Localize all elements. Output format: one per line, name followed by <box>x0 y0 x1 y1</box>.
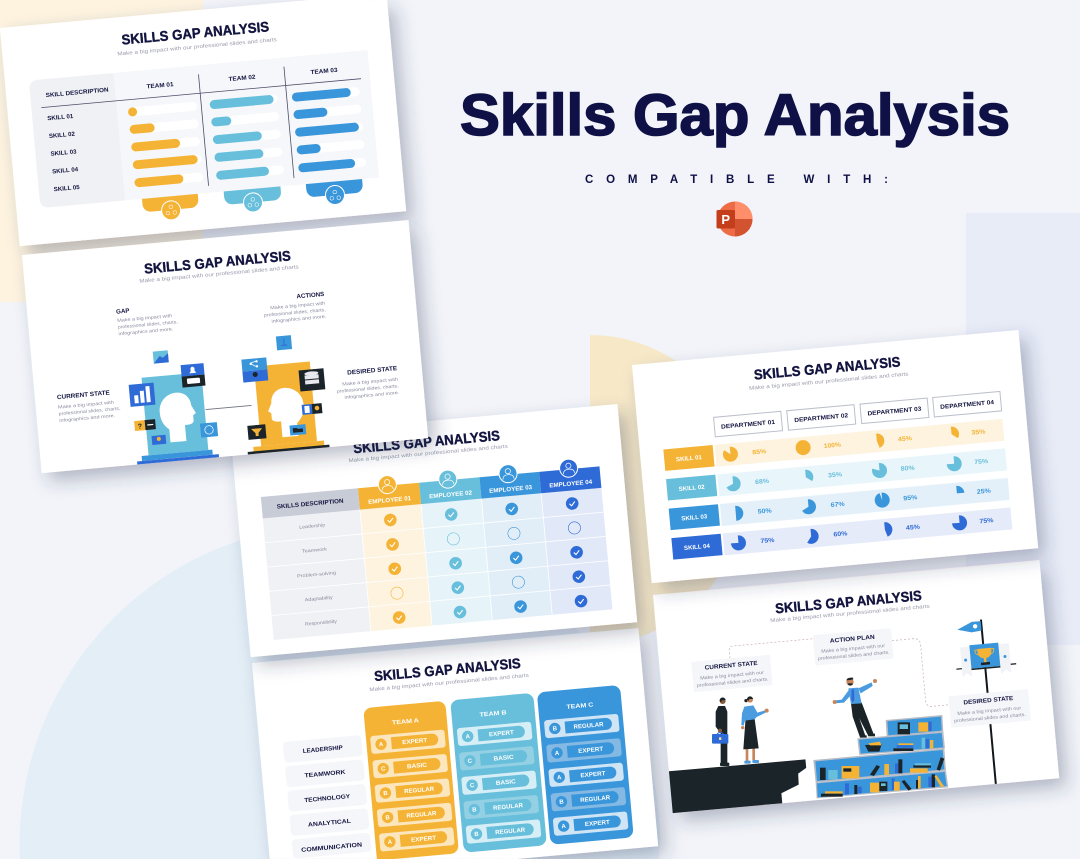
team tabs <box>142 176 363 212</box>
department headers: DEPARTMENT 04 <box>940 400 995 411</box>
flag <box>957 621 982 634</box>
Team C column <box>537 685 634 845</box>
table background <box>29 50 379 208</box>
background: pale blue rectangle <box>966 213 1080 645</box>
skill labels <box>47 114 81 193</box>
text block: current state: CURRENT STATE <box>57 389 110 401</box>
slide title: SKILLS GAP ANALYSIS <box>144 247 291 277</box>
employee icons <box>378 458 578 494</box>
callout: current state: professional slides and charts. <box>697 676 769 688</box>
callout: desired state <box>948 689 1031 728</box>
background: cream half circle <box>590 335 745 645</box>
row bands and skill labels: SKILL 02 <box>678 485 706 493</box>
pie row: skill 03: 67% <box>830 501 845 509</box>
callout: current state <box>691 655 773 692</box>
table headers: SKILL DESCRIPTION <box>46 87 109 99</box>
table header and body: EMPLOYEE 01 <box>368 496 412 506</box>
pie row: skill 02: 80% <box>900 465 915 473</box>
compatible with label: COMPATIBLE WITH: <box>585 174 888 186</box>
callout: current state: Make a big impact with our <box>700 670 765 681</box>
callout: desired state: Make a big impact with our <box>957 705 1022 716</box>
pie row: skill 01: 85% <box>752 448 767 456</box>
background: pale blue circle <box>20 524 660 859</box>
table header and body: EMPLOYEE 04 <box>549 480 593 489</box>
text block: desired state: professional slides, charts, <box>337 383 399 394</box>
table header and body: SKILLS DESCRIPTION <box>277 499 344 511</box>
Team C column: EXPERT <box>578 747 604 755</box>
slide subtitle: Make a big impact with our professional slides and charts <box>139 264 299 285</box>
pie row: skill 01 <box>726 427 986 459</box>
flag pole <box>980 619 997 784</box>
department headers: DEPARTMENT 03 <box>867 407 922 417</box>
row bands and skill labels <box>663 419 1012 560</box>
main title: Skills Gap Analysis <box>460 83 1010 148</box>
table headers: TEAM 03 <box>310 68 338 76</box>
table headers <box>46 67 338 100</box>
slide subtitle: Make a big impact with our professional slides and charts <box>348 444 509 464</box>
figure: man with briefcase <box>712 697 729 766</box>
Team C column: EXPERT <box>580 771 606 779</box>
skill labels: SKILL 01 <box>47 114 74 122</box>
pie row: skill 04: 60% <box>833 530 848 539</box>
trophy panel <box>954 641 1017 678</box>
text block: actions: Make a big impact with <box>270 300 326 310</box>
slide subtitle: Make a big impact with our professional slides and charts <box>369 673 529 693</box>
Team B column: B <box>472 807 477 814</box>
pie row: skill 02: 75% <box>974 458 989 466</box>
table headers: TEAM 02 <box>228 75 256 83</box>
text block: current state: Make a big impact with <box>58 400 115 410</box>
figure: presenter <box>833 678 877 738</box>
table header and body: Responsibility <box>305 619 338 627</box>
Team C column: EXPERT <box>585 820 610 828</box>
bar chart: team 03 <box>292 87 366 173</box>
department headers: DEPARTMENT 01 <box>721 420 776 431</box>
Team A column: C <box>381 766 386 773</box>
callout: current state: CURRENT STATE <box>705 661 758 672</box>
callout: desired state: DESIRED STATE <box>963 696 1014 706</box>
Team B column: REGULAR <box>495 828 526 836</box>
Team C column: REGULAR <box>573 722 604 731</box>
text block: current state: professional slides, charts, <box>58 406 121 416</box>
callout: action plan: Make a big impact with our <box>821 643 886 654</box>
skill labels: TEAMWORK <box>304 770 346 780</box>
slide title: SKILLS GAP ANALYSIS <box>774 587 922 616</box>
Team B column: REGULAR <box>493 803 524 812</box>
table headers: TEAM 01 <box>146 82 175 91</box>
cliff <box>669 759 809 813</box>
pie row: skill 04: 75% <box>979 517 994 525</box>
Team B column: C <box>470 783 475 789</box>
Team B column: BASIC <box>496 779 517 787</box>
Team B column: A <box>465 734 471 741</box>
text block: desired state: infographics and more. <box>344 390 399 400</box>
pie row: skill 01: 45% <box>898 435 913 443</box>
skill labels: SKILL 03 <box>50 149 77 158</box>
slide 2: gap diagram <box>22 220 428 473</box>
slide 5: department pie table <box>632 330 1038 583</box>
Team B column: B <box>474 832 480 838</box>
text block: current state <box>57 389 121 423</box>
text block: actions: infographics and more. <box>271 314 326 324</box>
Team B column: BASIC <box>493 755 515 763</box>
Team A column: REGULAR <box>406 811 437 820</box>
pie row: skill 01: 100% <box>824 441 841 450</box>
Team C column: A <box>561 824 567 830</box>
slide 6: action plan illustration <box>653 560 1059 813</box>
bookshelf <box>813 715 948 798</box>
slide 1: team skill bars <box>0 0 406 246</box>
background: cream block <box>0 0 203 302</box>
Team A column: TEAM A <box>392 718 420 727</box>
table header and body: Leadership <box>299 522 326 530</box>
text block: gap <box>116 303 178 336</box>
Team C column: B <box>552 726 558 733</box>
department headers: DEPARTMENT 02 <box>794 413 849 424</box>
table header and body: Adaptability <box>305 595 334 602</box>
slide 4: team skill levels <box>252 628 658 859</box>
table header and body: Teamwork <box>302 546 328 554</box>
checkmarks grid <box>384 497 588 624</box>
bar chart: team 01 <box>128 102 204 187</box>
icon: PowerPoint logo: P <box>721 212 730 227</box>
text block: gap: Make a big impact with <box>117 313 173 323</box>
slide subtitle: Make a big impact with our professional slides and charts <box>749 371 909 392</box>
slide subtitle: Make a big impact with our professional slides and charts <box>117 37 277 58</box>
text block: actions <box>262 291 327 324</box>
row bands and skill labels: SKILL 04 <box>684 544 711 552</box>
slide subtitle: Make a big impact with our professional slides and charts <box>770 604 930 624</box>
skill labels: TECHNOLOGY <box>304 794 350 804</box>
pie row: skill 03: 95% <box>903 494 918 502</box>
Team C column: A <box>555 751 560 757</box>
pie row: skill 04 <box>734 516 994 547</box>
dashed path <box>729 627 949 724</box>
table header and body: Problem-solving <box>297 570 337 579</box>
pie row: skill 04: 45% <box>906 524 921 532</box>
skill labels: SKILL 02 <box>49 132 76 140</box>
Team A column: EXPERT <box>402 738 428 746</box>
Team C column: REGULAR <box>580 795 611 804</box>
table header and body <box>261 466 612 640</box>
Team C column: TEAM C <box>566 702 594 711</box>
slide 3: employee skills table <box>231 404 637 657</box>
callout: action plan: ACTION PLAN <box>830 635 875 645</box>
Team A column <box>363 701 459 859</box>
icon group: current state icons <box>126 346 218 447</box>
text block: desired state <box>335 365 400 401</box>
slide title: SKILLS GAP ANALYSIS <box>353 427 500 456</box>
pie row: skill 03 <box>732 487 991 518</box>
skill labels: SKILL 04 <box>52 167 79 175</box>
pie row: skill 02: 35% <box>828 471 843 479</box>
skill labels: ANALYTICAL <box>308 819 352 829</box>
Team B column <box>450 693 547 853</box>
row bands and skill labels: SKILL 03 <box>681 514 708 523</box>
connector line <box>206 405 251 410</box>
text block: gap: GAP <box>116 308 130 316</box>
bar chart: team 02 <box>209 94 284 180</box>
Team B column: TEAM B <box>479 710 508 719</box>
row bands and skill labels: SKILL 01 <box>676 455 703 463</box>
pie row: skill 02 <box>729 457 989 488</box>
pie row: skill 01: 35% <box>971 428 986 437</box>
current state figure <box>130 371 219 464</box>
text block: actions: ACTIONS <box>296 291 325 300</box>
text block: desired state: Make a big impact with <box>342 377 399 387</box>
Team A column: A <box>388 840 393 846</box>
slide title: SKILLS GAP ANALYSIS <box>373 655 521 684</box>
skill labels: COMMUNICATION <box>301 842 362 854</box>
pie row: skill 04: 75% <box>760 537 775 545</box>
Team A column: BASIC <box>407 763 428 770</box>
text block: desired state: DESIRED STATE <box>347 365 397 377</box>
text block: actions: professional slides, charts, <box>264 307 326 318</box>
callout: desired state: professional slides and charts. <box>954 712 1026 723</box>
callout: action plan <box>813 628 894 666</box>
table header and body: EMPLOYEE 03 <box>489 485 533 495</box>
text block: current state: infographics and more. <box>59 413 115 423</box>
Team A column: REGULAR <box>404 787 435 795</box>
Team B column: EXPERT <box>489 730 514 738</box>
table dividers <box>40 60 369 200</box>
skill labels: LEADERSHIP <box>303 745 343 755</box>
skill labels: SKILL 05 <box>54 185 81 193</box>
Team A column: A <box>379 742 384 748</box>
Team A column: B <box>385 815 391 822</box>
Team B column: C <box>468 759 473 765</box>
pie row: skill 03: 50% <box>757 507 772 516</box>
icon group: desired state icons <box>240 332 329 440</box>
Team A column: EXPERT <box>411 836 437 844</box>
slide title: SKILLS GAP ANALYSIS <box>121 18 270 48</box>
text block: gap: professional slides, charts, <box>118 319 178 330</box>
slide title: SKILLS GAP ANALYSIS <box>753 353 901 383</box>
callout: action plan: professional slides and charts. <box>818 650 890 661</box>
Team A column: B <box>383 791 389 797</box>
icon group: current state icons: ? <box>138 423 142 431</box>
Team C column: B <box>559 799 565 806</box>
icon: PowerPoint logo <box>716 202 752 236</box>
figure: woman <box>741 696 769 764</box>
table header and body: EMPLOYEE 02 <box>429 490 473 500</box>
Team C column: A <box>557 775 562 781</box>
team icons <box>161 185 345 221</box>
pie row: skill 02: 68% <box>755 478 770 486</box>
text block: gap: infographics and more. <box>118 326 173 336</box>
skill labels <box>283 735 371 859</box>
pie row: skill 03: 25% <box>977 488 991 496</box>
desired state figure <box>240 360 330 454</box>
department headers <box>714 391 1002 437</box>
